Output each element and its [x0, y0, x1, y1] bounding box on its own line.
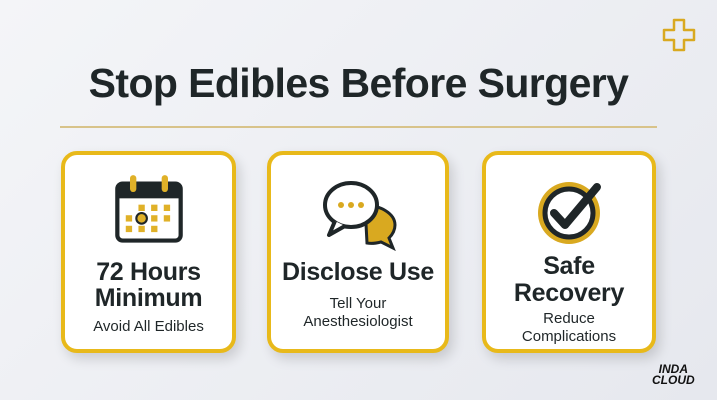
panel: 72 hours: [61, 151, 236, 353]
icon: calendar: [115, 175, 183, 243]
logo: inda cloud: [652, 362, 695, 387]
heading: Recovery: [514, 279, 624, 307]
heading: Minimum: [95, 284, 202, 312]
icon: chat bubbles: [323, 181, 396, 251]
panel: safe recovery: [482, 151, 656, 353]
title: Stop Edibles Before Surgery: [89, 60, 628, 106]
panel: disclose: [267, 151, 449, 353]
text: Anesthesiologist: [303, 313, 413, 330]
text: Reduce: [543, 310, 595, 327]
text: [522, 310, 616, 345]
heading: [514, 252, 624, 307]
logo: inda cloud: CLOUD: [652, 373, 695, 387]
heading: 72 Hours: [96, 258, 201, 286]
icon: check circle: [538, 182, 601, 244]
heading: [95, 258, 202, 312]
text: Avoid All Edibles: [93, 318, 204, 335]
logo: inda cloud: INDA: [659, 362, 688, 376]
heading: Safe: [543, 252, 595, 280]
text: [303, 295, 413, 330]
text: Complications: [522, 328, 616, 345]
heading: Disclose Use: [282, 258, 434, 286]
icon: plus logo: [662, 18, 696, 52]
text: Tell Your: [330, 295, 386, 312]
